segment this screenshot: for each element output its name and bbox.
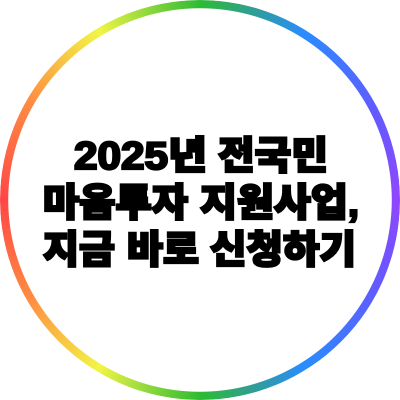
- title line 2: 지원사업,: [200, 182, 359, 225]
- title line 2: 마음투자: [43, 182, 188, 225]
- title line 1: [74, 135, 328, 178]
- title line 3: 신청하기: [210, 229, 356, 272]
- title line 3: 바로: [127, 229, 199, 272]
- title line 3: 지금: [43, 229, 115, 272]
- title line 1: 2025년: [74, 135, 207, 178]
- title line 3: [43, 229, 356, 272]
- title line 2: [43, 182, 359, 225]
- title line 1: 전국민: [218, 135, 328, 178]
